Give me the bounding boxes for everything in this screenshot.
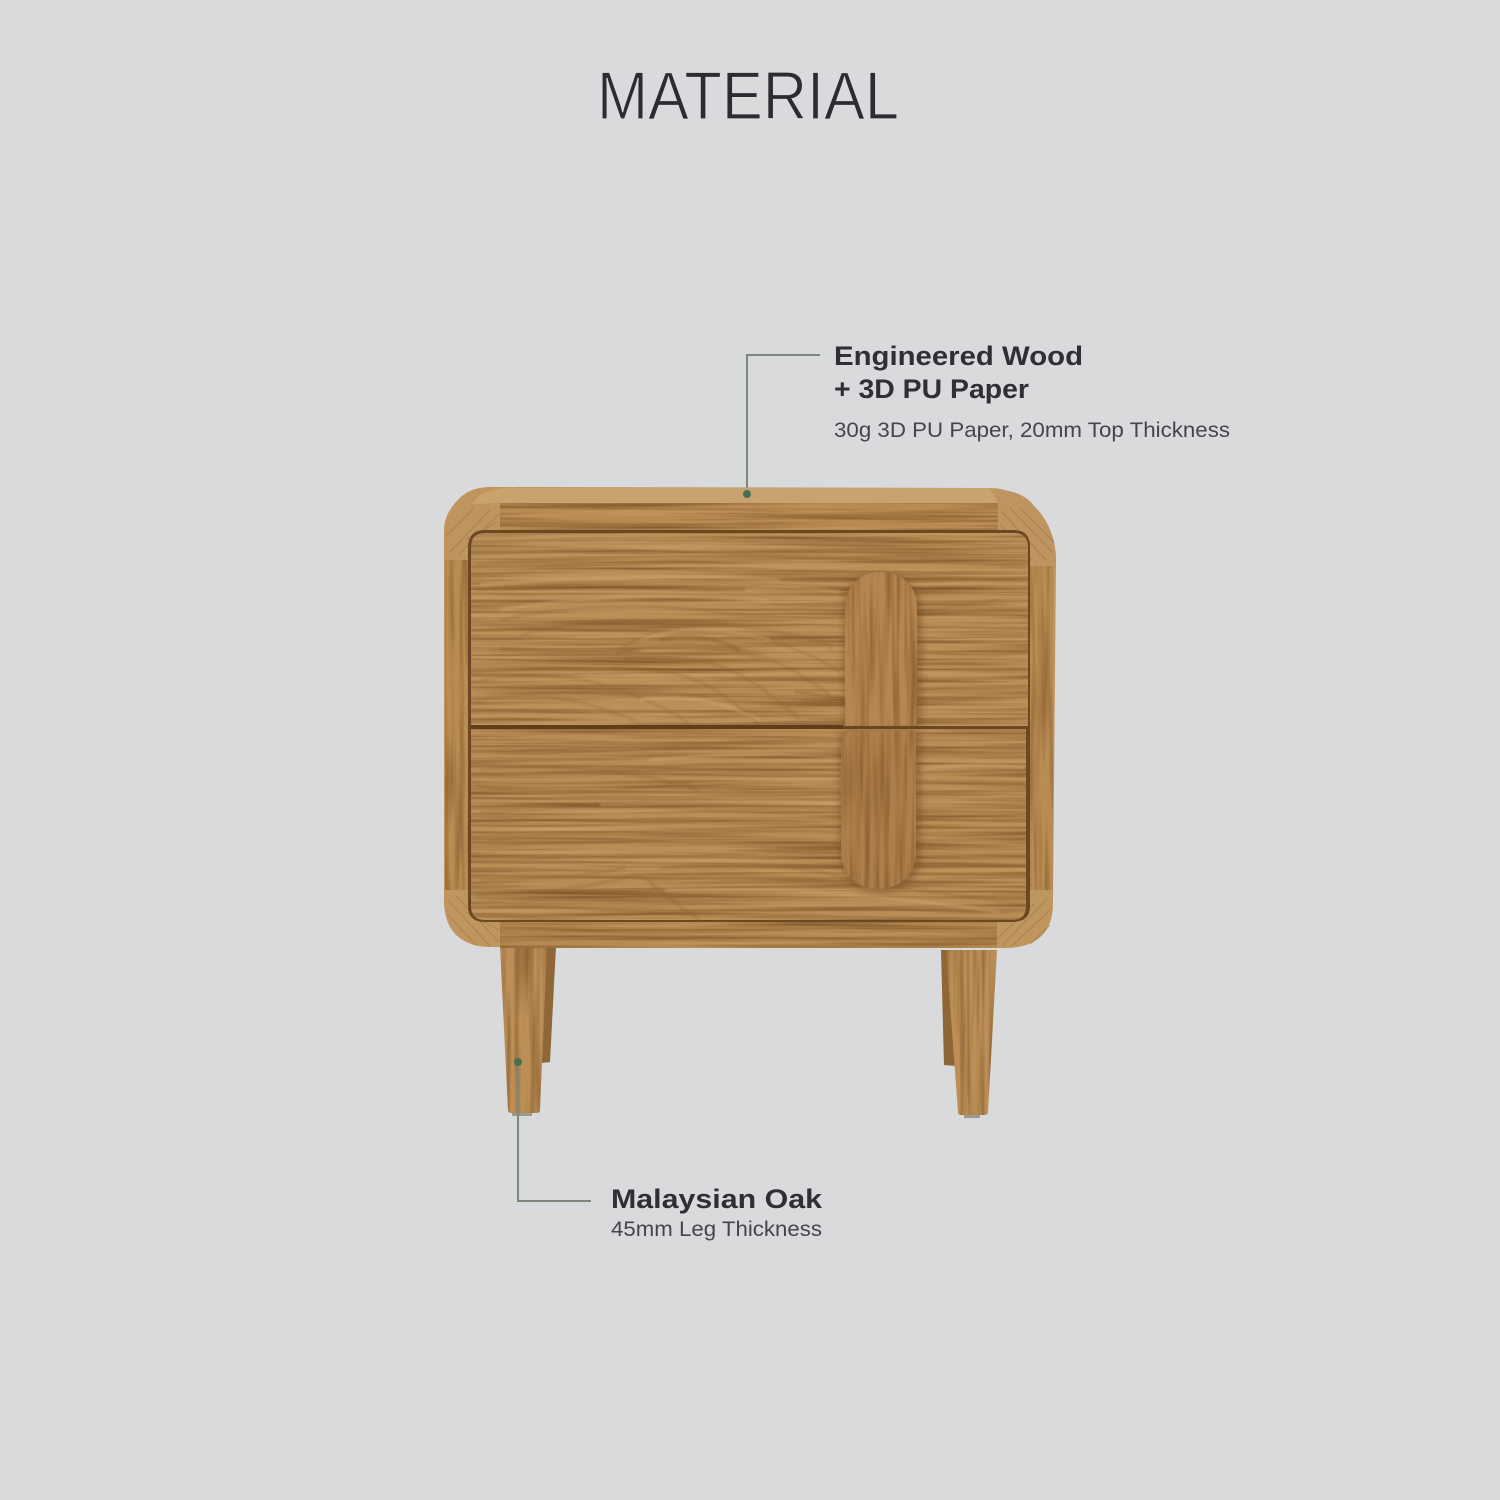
corner top right xyxy=(998,490,1056,566)
top rail xyxy=(500,503,998,531)
cathedral grain xyxy=(475,557,1026,726)
title: MATERIAL xyxy=(597,58,899,134)
lower drawer xyxy=(471,729,1026,920)
bottom rail xyxy=(500,922,997,948)
callout detail: 30g 3D PU Paper, 20mm Top Thickness xyxy=(834,419,1230,442)
back left leg xyxy=(542,946,556,1063)
upper drawer xyxy=(471,533,1028,726)
callout leader line xyxy=(747,355,820,494)
callout heading: Malaysian Oak xyxy=(611,1184,823,1214)
recess gap xyxy=(468,530,1030,922)
corner bottom right xyxy=(997,890,1053,948)
infographic canvas xyxy=(444,72,1230,1240)
callout heading: Engineered Wood xyxy=(834,341,1083,371)
cabinet frame xyxy=(444,487,1056,948)
gap between drawers xyxy=(471,725,843,729)
right side xyxy=(1029,566,1053,890)
callout: engineered wood xyxy=(747,341,1230,494)
upper handle xyxy=(843,572,922,728)
callout heading second line: + 3D PU Paper xyxy=(834,374,1030,404)
callout leader line xyxy=(518,1062,591,1201)
top surface xyxy=(500,488,998,503)
front right leg xyxy=(946,950,997,1118)
back right leg xyxy=(941,950,956,1066)
corner bottom left xyxy=(444,890,500,947)
marker dot: leg xyxy=(514,1058,522,1066)
callout: malaysian oak xyxy=(518,1062,823,1241)
nightstand illustration xyxy=(444,487,1056,1118)
corner top left xyxy=(444,487,516,560)
left side xyxy=(445,560,469,890)
knot grain xyxy=(475,768,1026,920)
front left leg xyxy=(500,947,547,1116)
marker dot: top xyxy=(743,490,751,498)
lower handle xyxy=(839,731,921,893)
callout detail: 45mm Leg Thickness xyxy=(611,1218,822,1241)
